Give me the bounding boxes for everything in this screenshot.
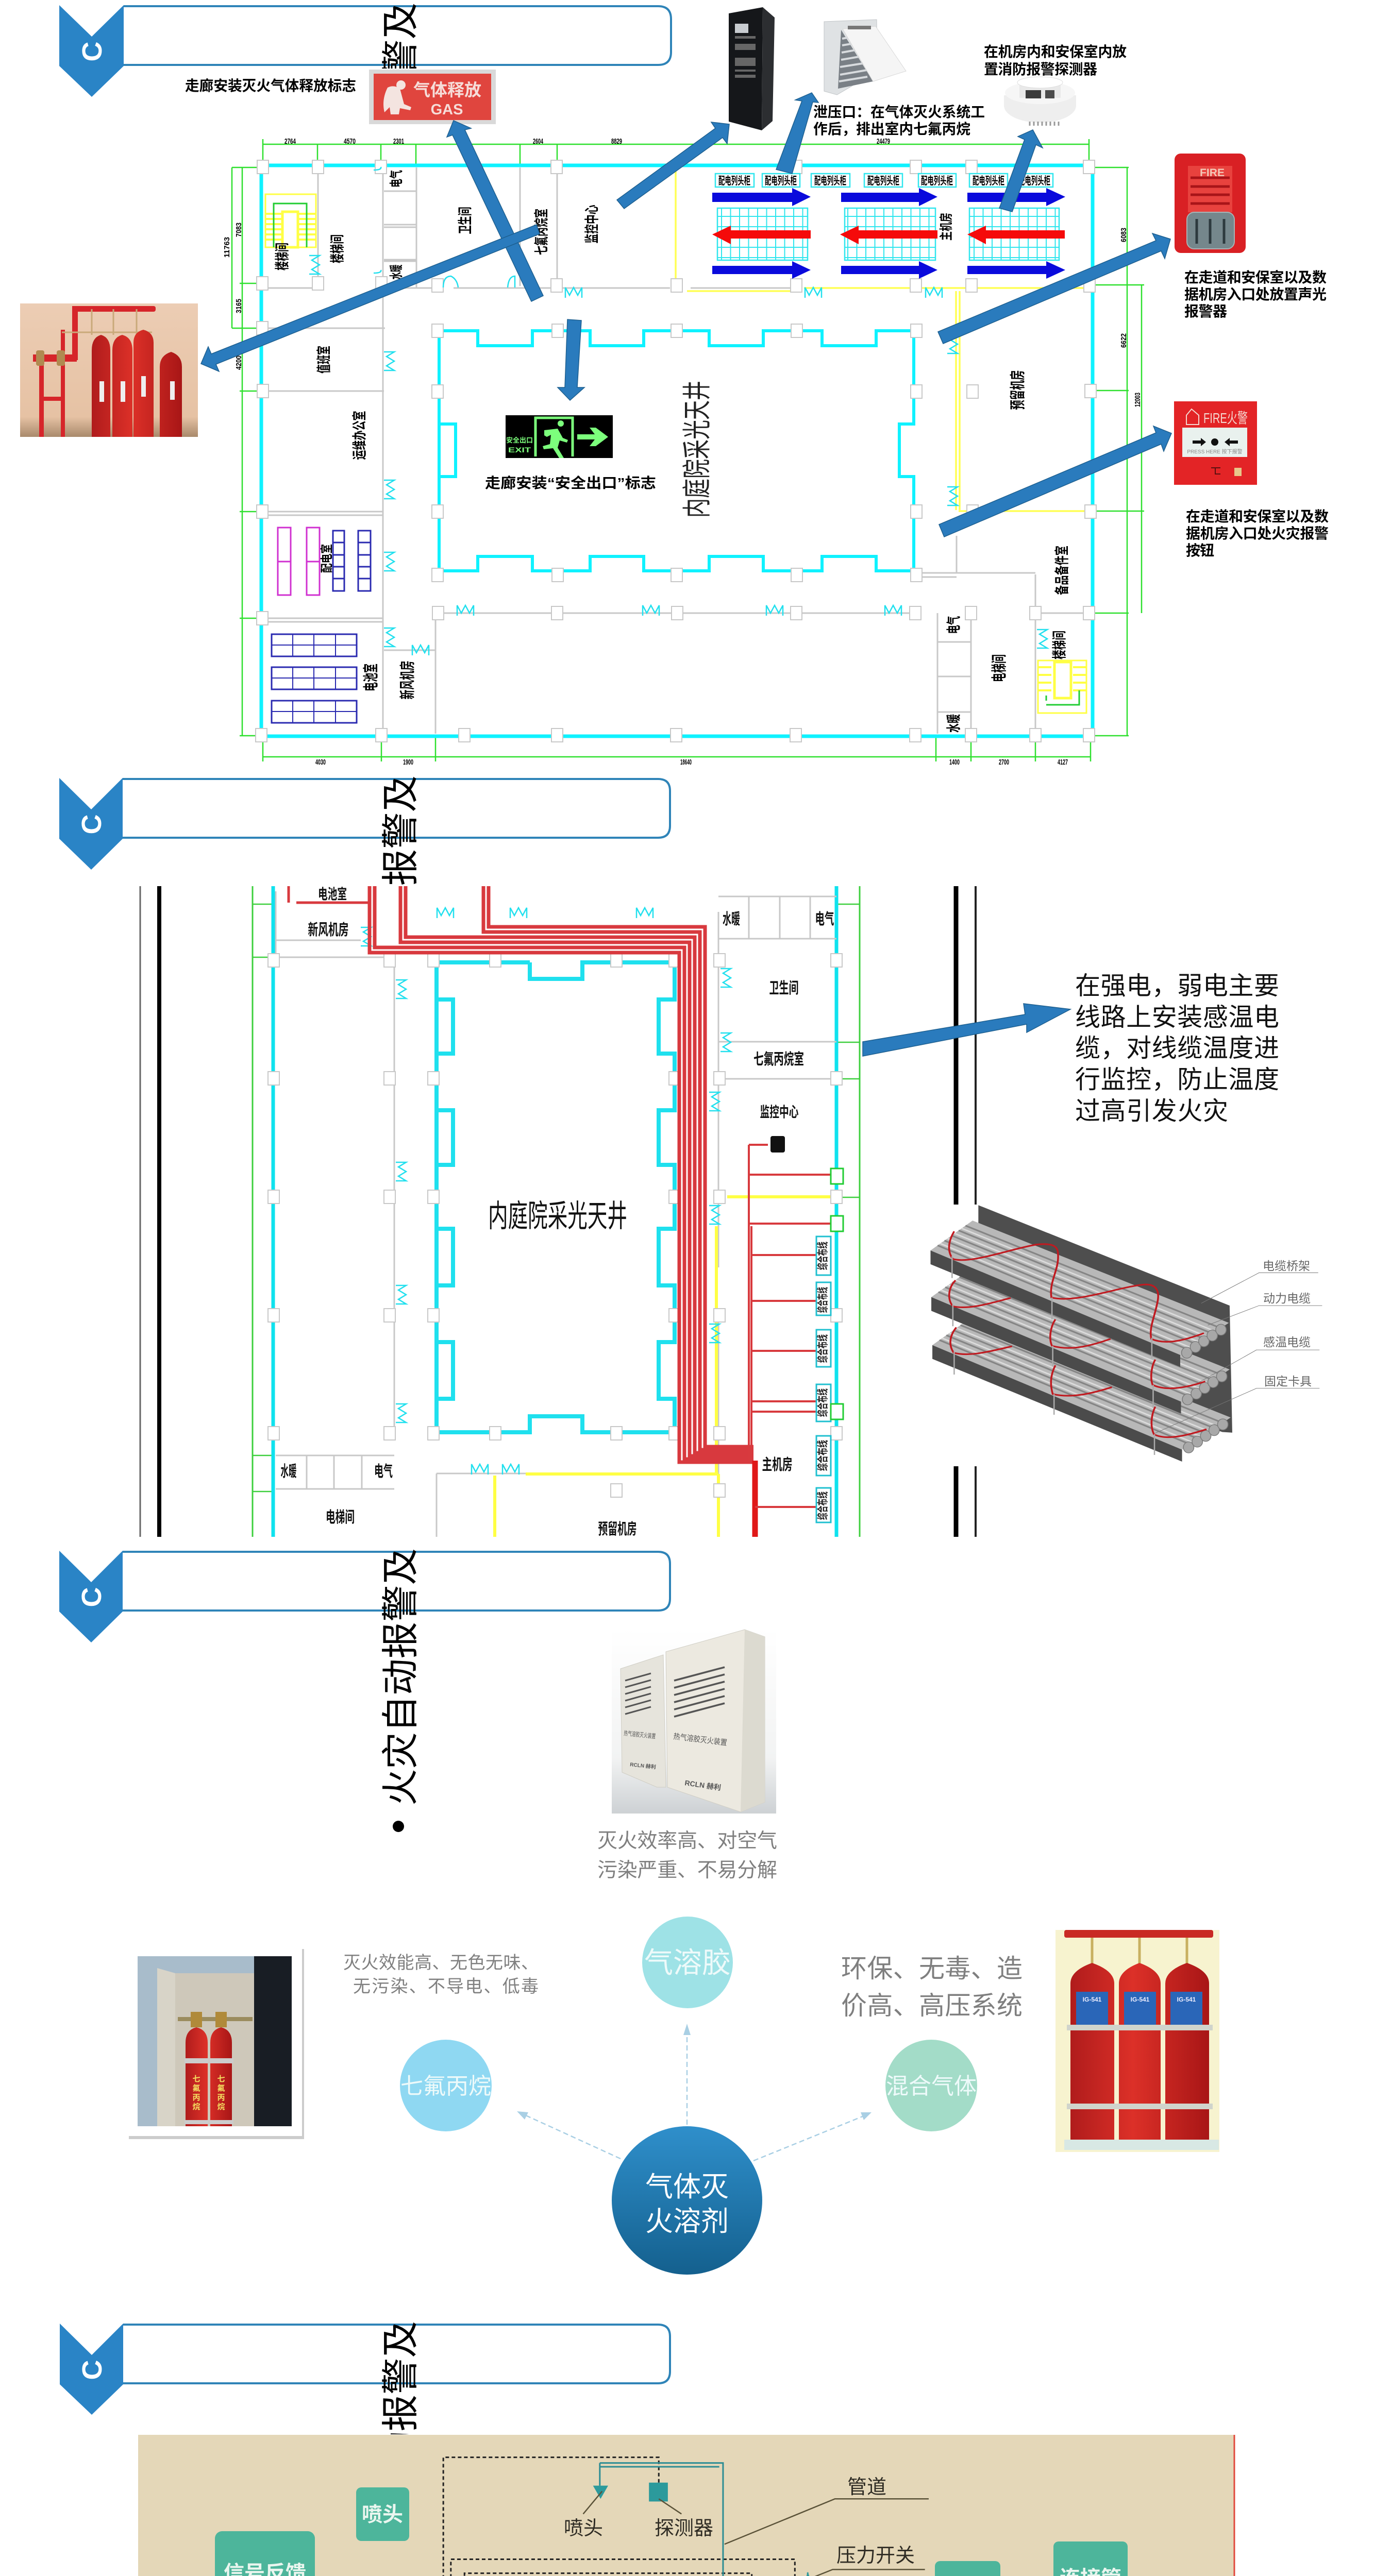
machine room racks: 配电列头柜 <box>921 175 953 187</box>
node: gas extinguishing agent center <box>612 2126 762 2275</box>
caption: sound and light alarm: 在走道和安保室以及数 <box>1184 269 1327 285</box>
node: mixed gas <box>885 2040 977 2131</box>
arrow: to sound alarm <box>938 233 1170 344</box>
plan room labels: 电池室 <box>318 886 347 902</box>
caption: relief vent: 泄压口：在气体灭火系统工 <box>813 104 985 120</box>
photo: heptafluoropropane cabinet <box>127 1946 304 2139</box>
cable route floor plan: 综合布线 <box>816 1492 829 1520</box>
machine room racks: 配电列头柜 <box>718 175 750 187</box>
room labels: 楼梯间 <box>329 234 345 263</box>
caption: corridor gas release sign: 走廊安装灭火气体释放标志 <box>185 78 356 94</box>
dimension numbers: 2604 <box>533 137 543 146</box>
plan room labels <box>280 886 834 1538</box>
icon: exit sign <box>506 415 613 458</box>
dimension numbers: 12003 <box>1133 393 1142 407</box>
node: gas extinguishing agent center: 火溶剂 <box>645 2206 729 2237</box>
heading title clipped: 火灾自动报警及 <box>380 775 422 1033</box>
caption: mixed gas properties: 价高、高压系统 <box>841 1991 1023 2020</box>
room labels: 电池室 <box>363 664 380 691</box>
panel: section C heat sensing cable <box>59 775 1322 1538</box>
piping schematic <box>440 2458 929 2576</box>
callout: heat sensing cable text <box>1075 972 1279 1125</box>
photo: aerosol extinguishing units: 热气溶胶灭火装置 <box>624 1729 656 1740</box>
room labels: 电梯间 <box>991 654 1008 682</box>
red heat sensing cable bundle <box>289 886 753 1462</box>
caption: smoke detector <box>984 44 1127 77</box>
photo: aerosol extinguishing units: 热气溶胶灭火装置 <box>673 1732 728 1748</box>
node: heptafluoropropane <box>400 2040 492 2131</box>
heading badge C: C <box>77 41 108 62</box>
machine room racks: 配电列头柜 <box>867 175 899 187</box>
icon: gas release sign: GAS <box>431 101 463 118</box>
plan room labels: 新风机房 <box>308 922 348 939</box>
plan room labels: 七氟丙烷室 <box>753 1051 804 1068</box>
heading badge C <box>59 778 670 870</box>
icon: smoke detector <box>1004 77 1076 126</box>
caption: relief vent: 作后，排出室内七氟丙烷 <box>813 121 970 137</box>
schematic labels: 喷头 <box>564 2518 603 2539</box>
arrow: to gas release sign <box>447 121 543 301</box>
icon: exit sign: 安全出口 <box>506 436 533 444</box>
caption: sound and light alarm: 据机房入口处放置声光 <box>1184 286 1327 302</box>
heading badge C <box>60 2324 670 2415</box>
arrow: to cable text <box>863 1004 1070 1056</box>
room labels: 预留机房 <box>1010 370 1027 410</box>
schematic labels: 管道 <box>847 2477 886 2498</box>
dimension numbers: 1400 <box>949 758 960 767</box>
schematic labels: 压力开关 <box>836 2545 915 2567</box>
arrow: to aerosol <box>683 2024 691 2125</box>
cable route floor plan: 综合布线 <box>816 1242 829 1270</box>
room labels: 楼梯间 <box>1051 631 1067 659</box>
icon: manual alarm button: PRESS HERE 按下报警 <box>1187 448 1243 455</box>
cable route floor plan: 综合布线 <box>816 1334 829 1363</box>
arrow: to cylinder photo <box>201 225 540 371</box>
caption: relief vent <box>813 104 985 137</box>
room labels: 监控中心 <box>584 205 600 243</box>
callout: heat sensing cable text: 缆，对线缆温度进 <box>1075 1035 1279 1062</box>
panel: section C gas extinguishing floor plan <box>20 3 1329 767</box>
photo: heptafluoropropane cabinet: 丙 <box>217 2093 225 2102</box>
dimension numbers: 3165 <box>234 299 243 313</box>
photo: pressure relief vent <box>824 20 906 95</box>
plan room labels: 水暖 <box>280 1463 297 1480</box>
photo: aerosol extinguishing units: RCLN 赫利 <box>684 1778 722 1792</box>
room labels: 运维办公室 <box>351 411 367 460</box>
photo: heptafluoropropane cabinet: 丙 <box>192 2093 200 2102</box>
icon: sound and light alarm: FIRE <box>1200 167 1225 179</box>
photo: fire control cabinet <box>729 7 775 130</box>
arrow: to exit sign <box>558 319 584 400</box>
dimension numbers <box>223 137 1142 767</box>
room labels: 卫生间 <box>457 207 473 234</box>
floor plan drawing <box>223 137 1144 767</box>
photo: heptafluoropropane cabinet: 氟 <box>217 2083 225 2093</box>
arrow: to relief vent <box>776 93 818 174</box>
arrow: to heptafluoropropane <box>517 2111 621 2159</box>
photo: mixed gas cylinders: IG-541 <box>1177 1996 1196 2003</box>
machine room racks: 配电列头柜 <box>814 175 846 187</box>
room labels: 电气 <box>946 616 962 634</box>
cable route floor plan: 综合布线 <box>816 1287 829 1313</box>
schematic labels: 探测器 <box>655 2518 713 2539</box>
callout: heat sensing cable text: 行监控，防止温度 <box>1075 1066 1279 1094</box>
heading title clipped: 火灾自动报警及 <box>380 3 422 260</box>
dimension numbers: 4030 <box>315 758 326 767</box>
photo: mixed gas cylinders <box>1055 1930 1219 2152</box>
caption: alarm button <box>1186 509 1329 558</box>
arrow: to mixed gas <box>753 2112 872 2161</box>
plan room labels: 主机房 <box>762 1456 793 1473</box>
dimension numbers: 6622 <box>1119 333 1128 348</box>
plan room labels: 电梯间 <box>326 1509 355 1526</box>
heading title vertical: 火灾自动报警及 <box>380 1548 422 1806</box>
dimension numbers: 2764 <box>284 137 296 146</box>
caption: corridor exit sign: 走廊安装“安全出口”标志 <box>485 475 656 491</box>
photo: aerosol extinguishing units <box>612 1629 776 1814</box>
component tags <box>156 2487 1205 2576</box>
dimension numbers: 6083 <box>1119 228 1128 242</box>
room labels: 电气 <box>389 170 404 188</box>
dimension numbers: 2700 <box>999 758 1009 767</box>
dimension numbers: 8829 <box>611 137 622 146</box>
icon: manual alarm button: FIRE火警 <box>1203 410 1248 426</box>
caption: heptafluoropropane properties: 无污染、不导电、低毒 <box>353 1977 539 1996</box>
arrow: to control cabinet <box>617 122 729 209</box>
heading badge C: C <box>76 1587 107 1607</box>
caption: smoke detector: 在机房内和安保室内放 <box>984 44 1127 60</box>
heading title clipped: 火灾自动报警及 <box>380 2321 422 2576</box>
dimension numbers: 18640 <box>680 758 692 767</box>
room labels: 七氟丙烷室 <box>533 209 549 255</box>
callout: heat sensing cable text: 线路上安装感温电 <box>1075 1004 1279 1031</box>
room labels: 楼梯间 <box>274 243 290 270</box>
caption: alarm button: 在走道和安保室以及数 <box>1186 509 1329 524</box>
machine room racks: 配电列头柜 <box>973 175 1004 187</box>
columns <box>256 160 1096 742</box>
callout: heat sensing cable text: 在强电，弱电主要 <box>1075 972 1279 1000</box>
caption: aerosol properties <box>597 1830 777 1882</box>
photo: gas cylinder group <box>20 303 198 437</box>
caption: sound and light alarm: 报警器 <box>1184 303 1227 319</box>
photo: heptafluoropropane cabinet: 烷 <box>192 2102 200 2111</box>
caption: mixed gas properties: 环保、无毒、造 <box>841 1954 1023 1983</box>
node: aerosol <box>642 1917 733 2008</box>
stairs <box>265 194 1086 713</box>
illustration: cable tray with heat sensing cable: 动力电缆 <box>1263 1292 1311 1305</box>
plan room labels: 内庭院采光天井 <box>488 1199 627 1233</box>
node: mixed gas: 混合气体 <box>886 2074 977 2099</box>
icon: gas release sign <box>369 70 496 124</box>
room labels <box>274 170 1070 733</box>
dimension numbers: 1900 <box>403 758 413 767</box>
photo: heptafluoropropane cabinet: 七 <box>217 2075 225 2083</box>
caption: aerosol properties: 污染严重、不易分解 <box>597 1859 777 1882</box>
node: gas extinguishing agent center: 气体灭 <box>645 2172 729 2202</box>
plan room labels: 预留机房 <box>598 1521 637 1538</box>
room labels: 值班室 <box>316 346 332 374</box>
power room and battery racks <box>272 528 371 723</box>
dimension numbers: 7083 <box>234 223 243 237</box>
caption: alarm button: 据机房入口处火灾报警 <box>1186 526 1329 541</box>
plan room labels: 卫生间 <box>769 980 799 997</box>
photo: aerosol extinguishing units: RCLN 赫利 <box>630 1761 656 1770</box>
room labels: 水暖 <box>389 265 404 279</box>
courtyard label: 内庭院采光天井 <box>681 381 713 518</box>
dimension numbers: 4127 <box>1058 758 1068 767</box>
schematic labels <box>468 2477 926 2576</box>
dimension numbers: 11763 <box>223 237 231 258</box>
photo: mixed gas cylinders: IG-541 <box>1131 1996 1150 2003</box>
caption: heptafluoropropane properties <box>343 1953 539 1996</box>
illustration: cable tray with heat sensing cable: 感温电缆 <box>1263 1335 1311 1349</box>
heading badge C: C <box>76 814 107 835</box>
caption: heptafluoropropane properties: 灭火效能高、无色无味、 <box>343 1953 539 1973</box>
caption: aerosol properties: 灭火效率高、对空气 <box>597 1830 777 1852</box>
caption: mixed gas properties <box>841 1954 1023 2020</box>
photo: heptafluoropropane cabinet: 氟 <box>192 2083 200 2093</box>
arrow: to detector <box>999 130 1043 212</box>
node: heptafluoropropane: 七氟丙烷 <box>400 2074 491 2099</box>
doors <box>309 167 1047 655</box>
plan room labels: 水暖 <box>723 911 740 928</box>
dimension numbers: 4200 <box>234 355 243 370</box>
plan room labels: 监控中心 <box>760 1104 799 1120</box>
dimension numbers: 2301 <box>393 137 404 146</box>
icon: exit sign: EXIT <box>508 446 531 454</box>
icon: sound and light alarm <box>1175 154 1246 253</box>
photo: heptafluoropropane cabinet: 烷 <box>217 2102 225 2111</box>
panel: section C gas extinguishing agents <box>59 1548 1219 2275</box>
black outer lines right <box>953 886 959 1537</box>
cable route floor plan: 综合布线 <box>816 1440 829 1471</box>
icon: gas release sign: 气体释放 <box>413 80 481 99</box>
machine room racks: 配电列头柜 <box>1018 175 1050 187</box>
system diagram board <box>138 2435 1235 2576</box>
plan room labels: 电气 <box>374 1463 393 1480</box>
heading badge C <box>59 1551 670 1642</box>
plan room labels: 电气 <box>815 911 834 928</box>
arrow: to alarm button <box>939 426 1171 537</box>
room labels: 新风机房 <box>399 660 416 700</box>
illustration: cable tray with heat sensing cable: 电缆桥架 <box>1263 1259 1310 1273</box>
callout: heat sensing cable text: 过高引发火灾 <box>1075 1097 1228 1125</box>
room labels: 主机房 <box>939 213 954 241</box>
illustration: cable tray with heat sensing cable: 固定卡具 <box>1264 1375 1312 1388</box>
photo: heptafluoropropane cabinet: 七 <box>192 2075 200 2083</box>
caption: alarm button: 按钮 <box>1186 543 1214 558</box>
dimension numbers: 24479 <box>877 137 890 146</box>
illustration: cable tray with heat sensing cable <box>931 1205 1322 1462</box>
walls <box>261 165 1094 736</box>
room labels: 水暖 <box>946 714 962 733</box>
machine room racks: 配电列头柜 <box>765 175 797 187</box>
cable route floor plan: 综合布线 <box>816 1388 829 1417</box>
dimension lines <box>232 139 1144 761</box>
component tags: 喷头 <box>362 2503 403 2526</box>
node: aerosol: 气溶胶 <box>644 1946 731 1979</box>
dimension numbers: 4570 <box>344 137 356 146</box>
cable route floor plan <box>140 886 860 1538</box>
room labels: 备品备件室 <box>1054 546 1070 595</box>
caption: sound and light alarm <box>1184 269 1327 319</box>
room labels: 配电室 <box>320 544 334 573</box>
icon: manual alarm button <box>1174 401 1257 485</box>
caption: smoke detector: 置消防报警探测器 <box>984 61 1097 77</box>
heading badge C: C <box>77 2360 108 2380</box>
heading badge C <box>59 5 671 97</box>
photo: mixed gas cylinders: IG-541 <box>1083 1996 1102 2003</box>
panel: section C gas extinguishing system diagram <box>60 2321 1235 2576</box>
machine room racks <box>712 174 1065 279</box>
